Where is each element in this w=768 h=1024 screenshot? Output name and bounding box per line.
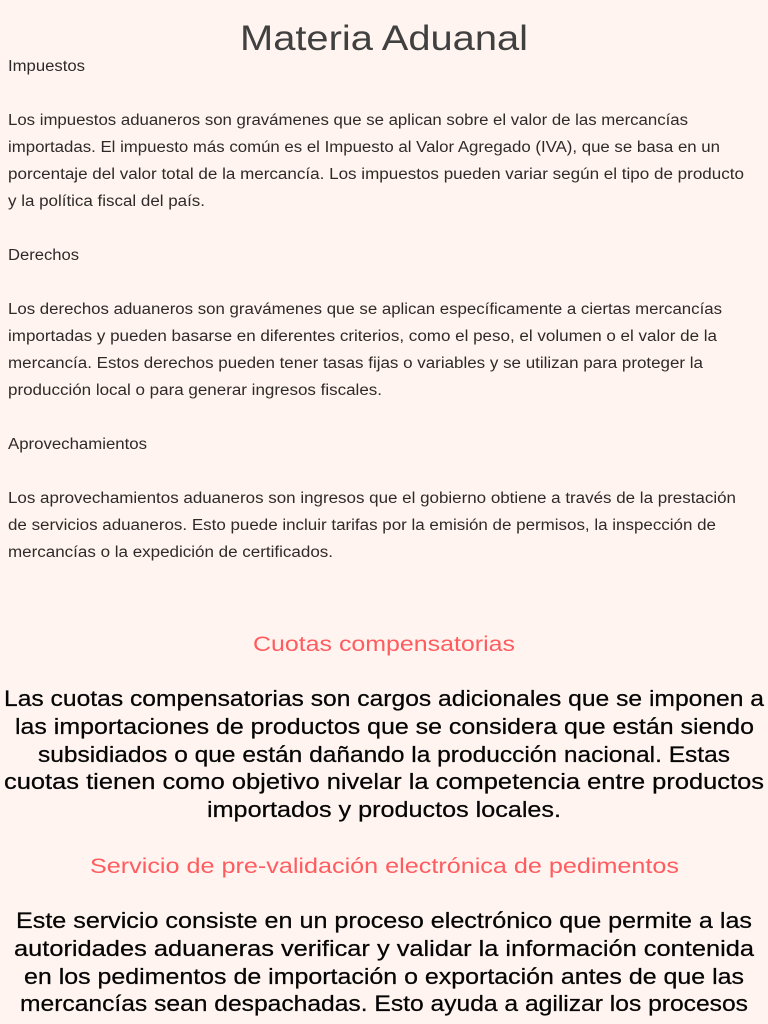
text block: Impuestos: importadas. El impuesto más común es el Impuesto al Valor Agregado (IVA), que se basa en un xyxy=(8,139,720,156)
text block: Aprovechamientos: mercancías o la expedición de certificados. xyxy=(8,544,333,561)
text block: Cuotas compensatorias: Las cuotas compensatorias son cargos adicionales que se imponen a xyxy=(4,686,765,711)
text block: Cuotas compensatorias: las importaciones de productos que se considera que están siendo xyxy=(15,714,754,739)
text block: Derechos: producción local o para generar ingresos fiscales. xyxy=(8,382,382,399)
text block: Aprovechamientos xyxy=(8,490,736,561)
title: Materia Aduanal xyxy=(240,19,528,58)
heading: Cuotas compensatorias: Cuotas compensatorias xyxy=(253,633,515,656)
text block: Derechos: importadas y pueden basarse en diferentes criterios, como el peso, el volumen o el valor de la xyxy=(8,328,717,345)
text block: Servicio de pre-validación: Este servicio consiste en un proceso electrónico que permite a las xyxy=(16,908,752,933)
text block: Cuotas compensatorias: importados y productos locales. xyxy=(207,797,561,822)
heading: Aprovechamientos: Aprovechamientos xyxy=(8,436,147,453)
text block: Impuestos: Los impuestos aduaneros son gravámenes que se aplican sobre el valor de las mercancías xyxy=(8,112,688,129)
text block: Derechos xyxy=(8,301,722,399)
text block: Impuestos: y la política fiscal del país. xyxy=(8,193,205,210)
text block: Servicio de pre-validación: autoridades aduaneras verificar y validar la información contenida xyxy=(14,936,755,961)
text block: Aprovechamientos: Los aprovechamientos aduaneros son ingresos que el gobierno obtiene a través de la prestación xyxy=(8,490,736,507)
text block: Impuestos: porcentaje del valor total de la mercancía. Los impuestos pueden variar según el tipo de producto xyxy=(8,166,744,183)
text block: Cuotas compensatorias: subsidiados o que están dañando la producción nacional. Estas xyxy=(38,742,730,767)
heading: Derechos: Derechos xyxy=(8,247,79,264)
text block: Derechos: Los derechos aduaneros son gravámenes que se aplican específicamente a ciertas mercancías xyxy=(8,301,722,318)
heading: Impuestos: Impuestos xyxy=(8,58,85,75)
text block: Cuotas compensatorias: cuotas tienen como objetivo nivelar la competencia entre productos xyxy=(4,769,764,794)
text block: Servicio de pre-validación: mercancías sean despachadas. Esto ayuda a agilizar los procesos xyxy=(20,991,748,1016)
text block: Servicio de pre-validación: en los pedimentos de importación o exportación antes de que las xyxy=(24,964,744,989)
text block: Impuestos xyxy=(8,112,744,210)
text block: Cuotas compensatorias xyxy=(4,686,765,822)
text block: Aprovechamientos: de servicios aduaneros. Esto puede incluir tarifas por la emisión de permisos, la inspección de xyxy=(8,517,716,534)
text block: Servicio de pre-validación xyxy=(14,908,755,1016)
text block: Derechos: mercancía. Estos derechos pueden tener tasas fijas o variables y se utilizan para proteger la xyxy=(8,355,703,372)
heading: Servicio de pre-validación electrónica de pedimentos: Servicio de pre-validación electrónica de pedimentos xyxy=(90,855,679,878)
